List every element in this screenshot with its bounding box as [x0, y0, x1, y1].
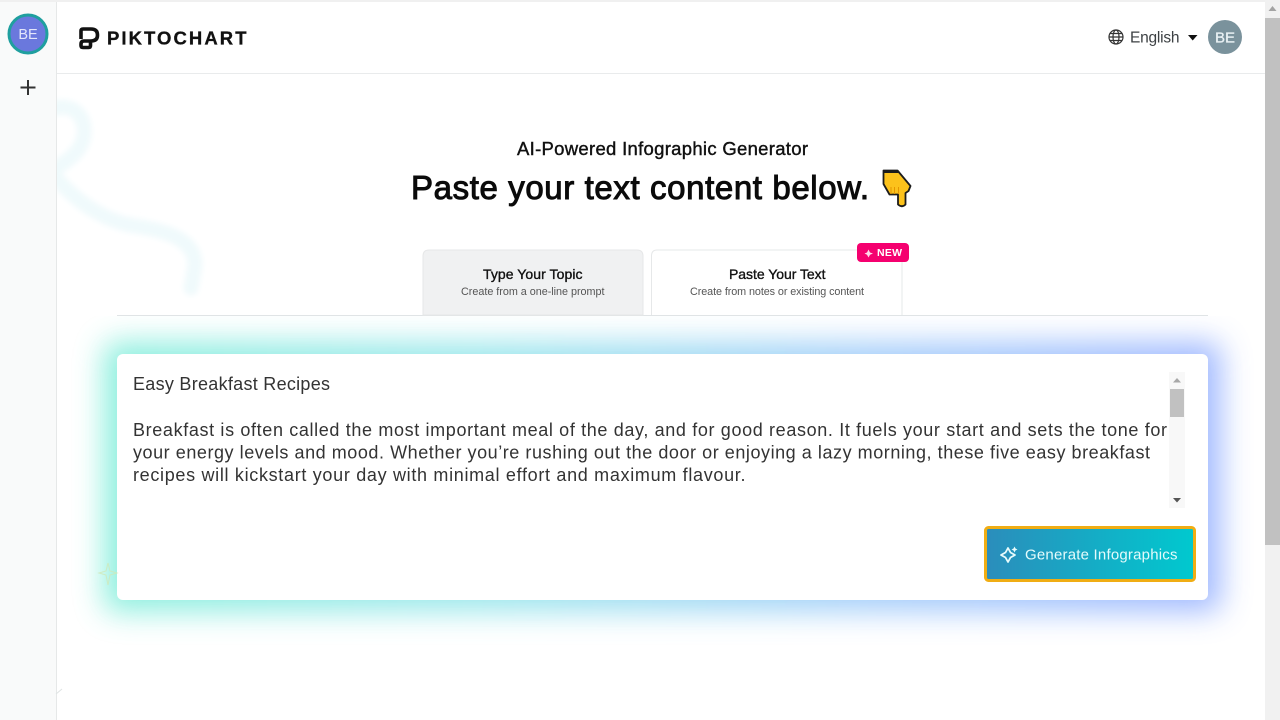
icon: sparkle	[1001, 548, 1015, 562]
language selector: English	[1130, 30, 1180, 46]
header bar	[57, 2, 1265, 74]
tab: type your topic: Create from a one-line prompt	[461, 286, 604, 298]
badge: new	[857, 243, 909, 262]
workspace avatar: BE	[18, 27, 38, 43]
input paragraph: recipes will kickstart your day with minimal effort and maximum flavour.	[133, 465, 746, 485]
input paragraph: your energy levels and mood. Whether you’re rushing out the door or enjoying a lazy morning, these five easy breakfast	[133, 442, 1150, 462]
workspace avatar	[9, 15, 47, 53]
subtitle: AI-Powered Infographic Generator	[517, 138, 808, 159]
main heading: Paste your text content below.	[411, 169, 869, 206]
panel glow	[104, 342, 1221, 612]
input paragraph: Breakfast is often called the most important meal of the day, and for good reason. It fuels your start and sets the tone for	[133, 420, 1167, 440]
tab: type your topic: Type Your Topic	[483, 266, 582, 282]
generate button	[986, 528, 1194, 580]
language selector	[1109, 30, 1198, 46]
icon: pointing down hand	[884, 170, 910, 206]
tabs baseline	[117, 315, 1208, 316]
input paragraph	[133, 420, 1167, 485]
generate button: Generate Infographics	[1025, 546, 1178, 564]
input scrollbar	[1169, 372, 1185, 508]
tab: paste your text: Create from notes or existing content	[690, 286, 864, 298]
input title: Easy Breakfast Recipes	[133, 374, 330, 394]
tab: paste your text	[652, 250, 902, 315]
badge: new: NEW	[877, 247, 902, 259]
user avatar: BE	[1215, 30, 1235, 46]
user avatar	[1208, 20, 1242, 54]
tab: paste your text: Paste Your Text	[729, 266, 826, 282]
decorative sparkle	[99, 563, 117, 585]
page scrollbar	[1265, 0, 1280, 720]
left sidebar	[0, 2, 57, 720]
add button	[20, 80, 36, 95]
logo: Piktochart: PIKTOCHART	[107, 28, 247, 48]
decorative swirl	[55, 107, 195, 288]
tab: type your topic	[423, 250, 643, 315]
panel: text input	[117, 354, 1208, 600]
small corner mark	[56, 689, 62, 694]
